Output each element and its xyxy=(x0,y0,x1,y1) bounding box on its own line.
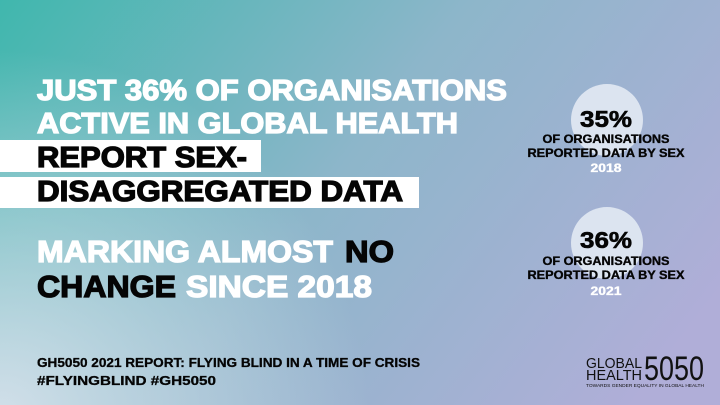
circle xyxy=(571,84,643,156)
headline: DISAGGREGATED DATA xyxy=(37,176,403,208)
logo: Global Health 5050: TOWARDS GENDER EQUALITY IN GLOBAL HEALTH xyxy=(586,383,704,388)
year: 2018 xyxy=(590,163,622,175)
logo: Global Health 5050 xyxy=(586,350,704,388)
headline: REPORT SEX- xyxy=(37,142,247,174)
stat: 2018 xyxy=(528,84,685,175)
subheading: NO xyxy=(345,234,394,269)
percentage: 35% xyxy=(580,106,632,132)
circle xyxy=(571,207,643,279)
description: OF ORGANISATIONS xyxy=(542,256,670,268)
white highlight bars xyxy=(0,140,419,208)
headline: JUST 36% OF ORGANISATIONS xyxy=(37,75,507,107)
headline xyxy=(37,75,507,208)
report citation: #FLYINGBLIND #GH5050 xyxy=(37,374,216,388)
subheading xyxy=(37,234,394,304)
headline: ACTIVE IN GLOBAL HEALTH xyxy=(37,108,458,140)
percentage: 36% xyxy=(580,227,632,253)
subheading: CHANGE xyxy=(37,269,176,304)
logo: Global Health 5050: 5050 xyxy=(644,350,704,388)
logo: Global Health 5050: HEALTH xyxy=(586,368,642,384)
report citation: GH5050 2021 REPORT: FLYING BLIND IN A TIME OF CRISIS xyxy=(37,356,420,370)
description: OF ORGANISATIONS xyxy=(542,134,670,146)
subheading: SINCE 2018 xyxy=(186,269,372,304)
stat: 2021 xyxy=(528,207,685,298)
stat: 2018: REPORTED DATA BY SEX xyxy=(528,148,685,160)
subheading: MARKING ALMOST xyxy=(37,234,333,269)
report citation xyxy=(37,356,420,388)
year: 2021 xyxy=(590,286,622,298)
stat: 2021: REPORTED DATA BY SEX xyxy=(528,270,685,282)
logo: Global Health 5050: GLOBAL xyxy=(586,356,642,372)
